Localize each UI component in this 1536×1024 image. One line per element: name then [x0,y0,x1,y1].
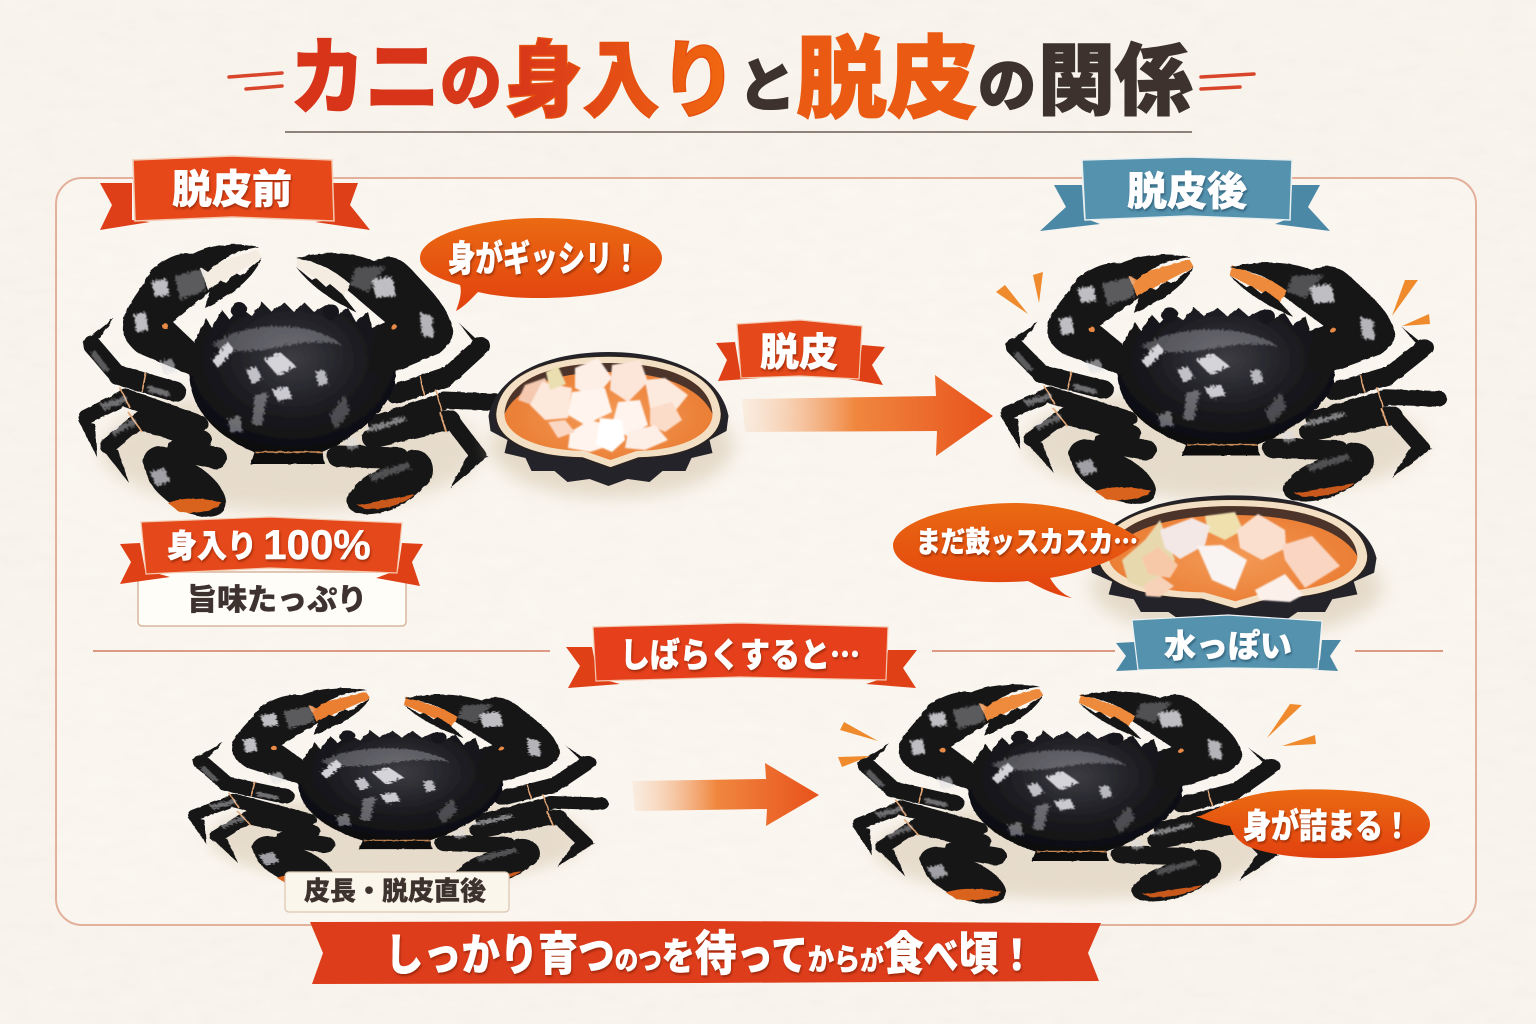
title text: の [440,49,502,118]
title text: 関係 [1038,37,1192,125]
speech bubble: packed: 身がギッシリ！ [448,238,640,279]
crab: growth right after molt [187,688,601,897]
bottom banner [310,921,1101,984]
arrow: molting [742,375,993,456]
title text: の [978,54,1036,119]
title dashes right [1201,74,1254,89]
after a while ribbon: しばらくすると… [620,628,860,677]
before molt ribbon [100,156,370,230]
100% ribbon [120,517,423,626]
title text: と [738,54,796,119]
watery ribbon [1116,615,1341,671]
watery ribbon: 水っぽい [1164,628,1292,664]
after a while ribbon [566,623,917,688]
label: just after molt: 皮長・脱皮直後 [304,876,486,906]
title text: 身入り [505,34,737,128]
speech bubble: still hollow: まだ鼓ッスカスカ… [916,519,1138,561]
tasty label: 旨味たっぷり [187,584,367,617]
speech bubble: packed [420,218,662,311]
panel frame [56,178,1476,925]
open shell full of meat [488,352,734,498]
title [229,30,1254,132]
impact rays: filled crab [838,704,1316,767]
title underline [285,131,1192,133]
molt ribbon [716,320,885,385]
label: just after molt [285,872,509,912]
after molt ribbon [1040,157,1330,231]
bottom banner: しっかり育つのつを待ってからが食べ頃！ [385,928,1035,981]
before molt ribbon: 脱皮前 [172,168,292,212]
meat chunks [1122,512,1340,602]
100% ribbon: 100% [263,521,371,568]
speech bubble: meat fills [1196,789,1430,858]
after molt ribbon: 脱皮後 [1127,170,1247,214]
title text: 脱皮 [796,30,978,130]
meat chunks [518,358,688,452]
divider line [93,650,1443,652]
molt ribbon: 脱皮 [760,332,838,375]
title dashes left [229,73,282,89]
speech bubble: meat fills: 身が詰まる！ [1243,807,1411,846]
speech bubble: still hollow [893,503,1140,598]
title text: カニ [290,31,440,125]
crab: after molt [1000,255,1438,515]
impact rays: after molt crab [996,272,1430,326]
title text [290,30,1192,130]
arrow: growth [632,763,819,826]
tasty label [138,572,406,626]
crab: filled out [852,684,1285,914]
crab: before molt [78,244,494,529]
open shell watery [1089,495,1382,638]
100% ribbon: 身入り [167,528,257,564]
